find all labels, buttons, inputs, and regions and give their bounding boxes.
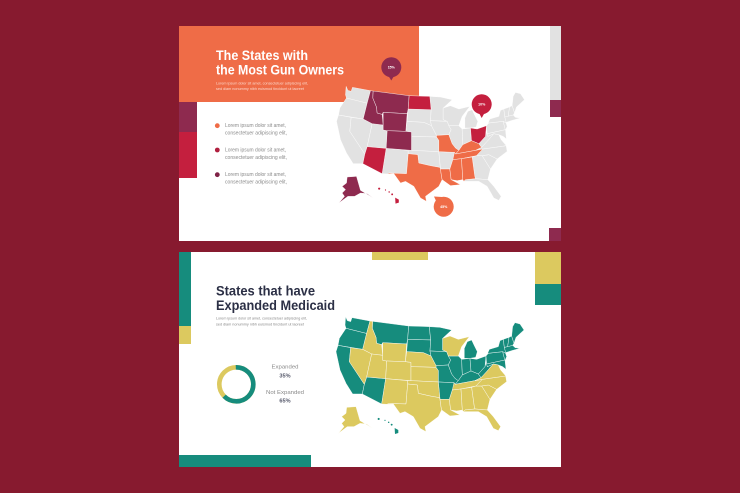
donut chart [219,367,253,401]
list item 1: consectetuer adipiscing elit, [225,130,287,136]
list item 2: Lorem ipsum dolor sit amet, [225,148,286,154]
heading: medicaid: States that have [216,284,315,299]
right accent teal [535,284,561,305]
left accent maroon [179,102,197,132]
medicaid description: Lorem ipsum dolor sit amet, consectetuer adipiscing elit, [216,317,307,321]
list item 3: Lorem ipsum dolor sit amet, [225,172,286,178]
list item 3: consectetuer adipiscing elit, [225,180,287,186]
pin 10% [472,94,492,118]
left accent crimson [179,132,197,178]
medicaid description: sed diam nonummy nibh euismod tincidunt ut laoreet [216,323,305,327]
list item 2: consectetuer adipiscing elit, [225,155,287,161]
map: medicaid [336,317,524,434]
pin 10%: 10% [478,103,486,107]
heading: gun owners: The States with [216,48,308,63]
header band [179,26,419,102]
list item 1 [215,123,287,136]
right accent grey [550,26,561,100]
pin 15%: 15% [388,66,396,70]
corner accent [549,228,561,241]
bottom accent teal [179,455,311,467]
pin 45% [434,196,454,217]
left accent teal [179,252,191,326]
legend: not expanded: 65% [279,399,291,405]
list item 2 [215,148,287,161]
legend: expanded: 35% [279,374,291,380]
list item 1: Lorem ipsum dolor sit amet, [225,123,286,129]
right accent yellow [535,252,561,284]
top accent yellow [372,252,428,260]
legend: expanded: Expanded [272,364,298,370]
map: gun owners [336,86,524,204]
left accent yellow [179,326,191,344]
list item 3 [215,172,287,186]
header description: sed diam nonummy nibh euismod tincidunt ut laoreet [216,87,305,91]
legend: not expanded: Not Expanded [266,390,304,396]
heading: medicaid: Expanded Medicaid [216,298,335,313]
right accent maroon [550,100,561,117]
legend: expanded [272,364,298,380]
heading: gun owners: the Most Gun Owners [216,62,344,78]
panel: medicaid [179,252,561,467]
legend: not expanded [266,390,304,405]
pin 45%: 45% [440,205,448,209]
panel: gun owners [179,26,561,241]
header description: Lorem ipsum dolor sit amet, consectetuer adipiscing elit, [216,82,308,86]
pin 15% [381,57,401,80]
